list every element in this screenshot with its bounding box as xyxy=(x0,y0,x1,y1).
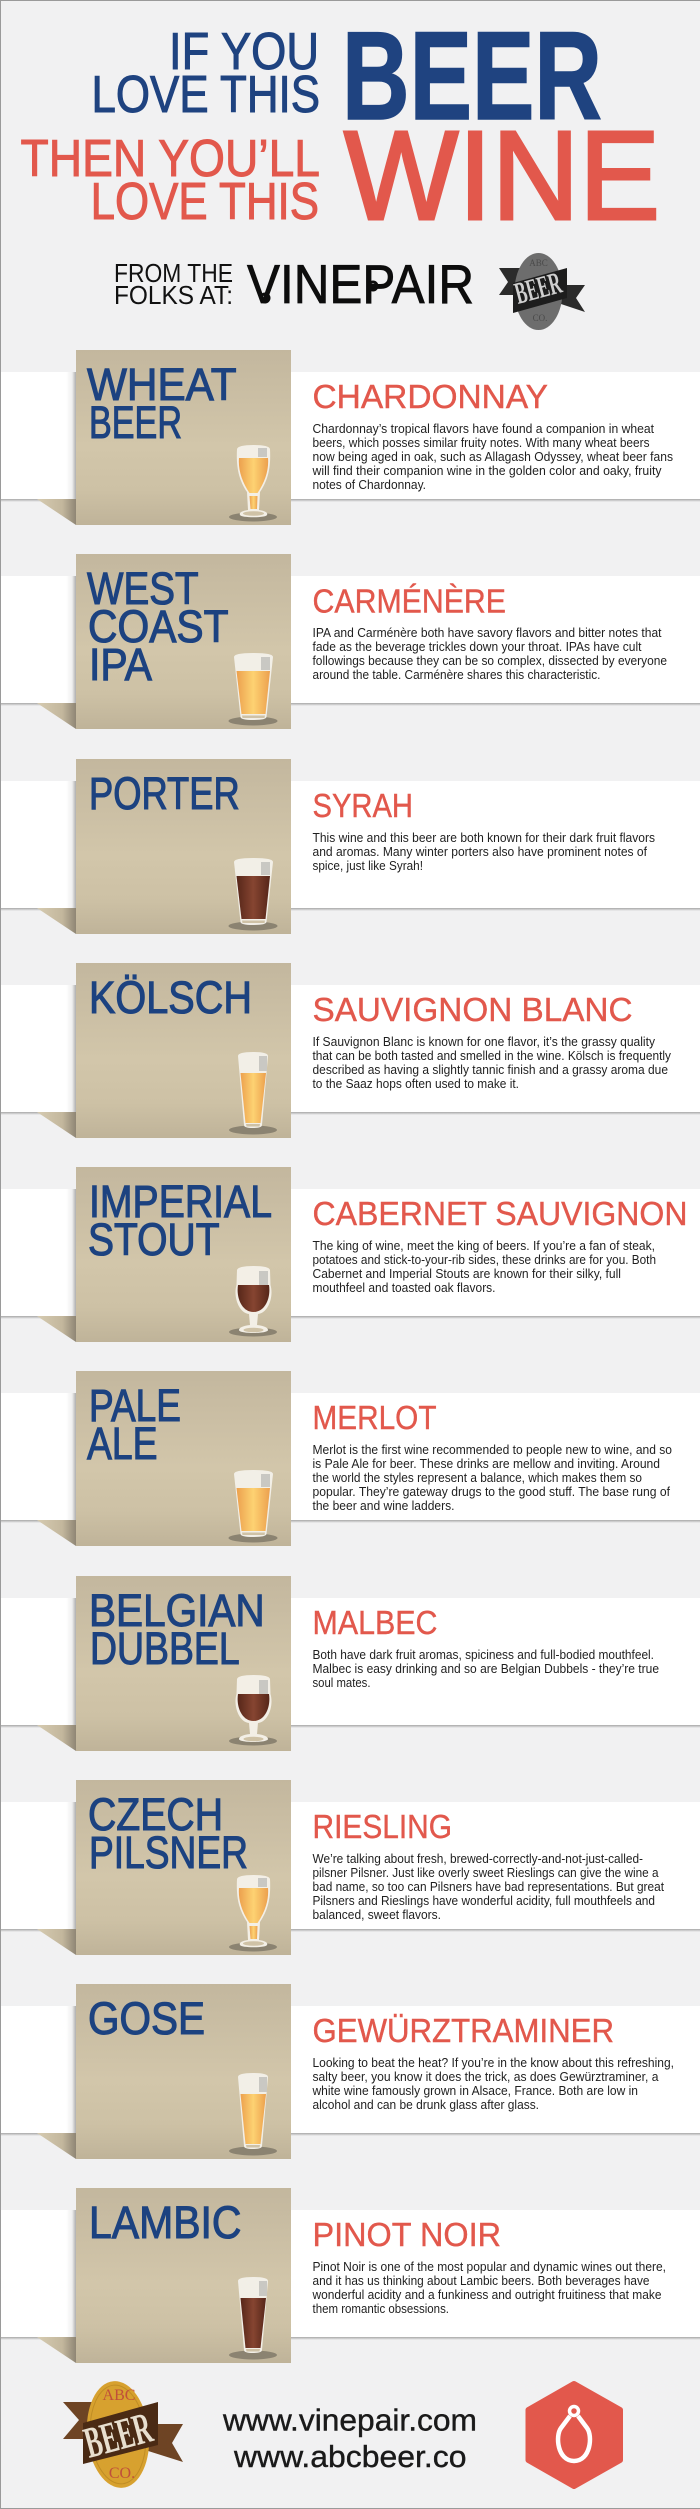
row: belgian dubbel and malbec xyxy=(0,1576,700,1751)
title xyxy=(20,7,660,246)
icon: pint glass amber xyxy=(228,653,278,726)
description: white wine famously grown in Alsace, France. Both are low in xyxy=(312,2084,638,2098)
white band xyxy=(0,1802,700,1932)
tag fold xyxy=(37,1929,76,1955)
description xyxy=(312,831,655,873)
white band xyxy=(0,576,700,706)
beer name xyxy=(88,1789,248,1878)
description: balanced, sweet flavors. xyxy=(312,1908,441,1922)
white band xyxy=(0,985,700,1115)
description: potatoes and stick-to-your-rib sides, these drinks are for you. Both xyxy=(312,1253,656,1267)
tag fold xyxy=(37,2337,76,2363)
tag shadow xyxy=(66,2210,76,2337)
description: alcohol and can be drunk glass after glass. xyxy=(312,2098,539,2112)
beer tag panel xyxy=(76,1167,291,1342)
wine name: MERLOT xyxy=(312,1399,436,1436)
heading: then you'll love this wine: WINE xyxy=(344,105,660,246)
beer name: PALE xyxy=(89,1380,181,1431)
description: bad name, so too can Pilsners have bad representations. But great xyxy=(312,1880,664,1894)
logo: abc beer co grey: BEER xyxy=(511,265,566,311)
wine name: RIESLING xyxy=(312,1808,452,1845)
description: spice, just like Syrah! xyxy=(312,859,423,873)
description: Pilsners and Rieslings have wonderful acidity, full mouthfeels and xyxy=(312,1894,655,1908)
beer name: CZECH xyxy=(88,1789,223,1840)
row: pale ale and merlot xyxy=(0,1371,700,1546)
description xyxy=(312,1239,656,1295)
tag fold xyxy=(37,499,76,525)
wine name: CARMÉNÈRE xyxy=(312,582,506,620)
beer name: WHEAT xyxy=(87,359,237,410)
beer name: BELGIAN xyxy=(89,1585,265,1636)
beer tag panel xyxy=(76,963,291,1138)
description: to the Saaz hops often used to make it. xyxy=(312,1077,519,1091)
website links: www.vinepair.com xyxy=(222,2402,477,2438)
description: wonderful acidity and a funkiness and outright fruitiness that make xyxy=(312,2288,662,2302)
description: The king of wine, meet the king of beers. If you’re a fan of steak, xyxy=(312,1239,655,1253)
description: mouthfeel and toasted oak flavors. xyxy=(312,1281,496,1295)
tag shadow xyxy=(66,1598,76,1725)
white band xyxy=(0,2210,700,2340)
heading: then you'll love this wine: THEN YOU’LL xyxy=(20,130,320,188)
tag fold xyxy=(37,1316,76,1342)
heading: then you'll love this wine xyxy=(20,105,660,246)
description: Merlot is the first wine recommended to people new to wine, and so xyxy=(312,1443,672,1457)
tag fold xyxy=(37,1725,76,1751)
logo: abc beer co colour: ABC xyxy=(103,2387,135,2404)
beer name xyxy=(89,1585,265,1674)
description xyxy=(312,1852,664,1922)
wine name: MALBEC xyxy=(312,1604,438,1641)
white band xyxy=(0,1393,700,1523)
beer name: STOUT xyxy=(88,1214,220,1265)
tag shadow xyxy=(66,985,76,1112)
beer name xyxy=(87,563,229,690)
icon: pint glass dark xyxy=(228,858,278,930)
tag fold xyxy=(37,1112,76,1138)
beer name: PORTER xyxy=(89,768,240,819)
beer name: COAST xyxy=(88,601,229,652)
heading: if you love this beer: IF YOU xyxy=(169,23,319,81)
description xyxy=(312,422,673,492)
description: now being aged in oak, such as Allagash Odyssey, wheat beer fans xyxy=(312,450,673,464)
white band xyxy=(0,1189,700,1319)
row: lambic and pinot noir xyxy=(0,2188,700,2363)
description: the world the styles represent a balance, which makes them so xyxy=(312,1471,642,1485)
description: them romantic obsessions. xyxy=(312,2302,449,2316)
beer tag panel xyxy=(76,1576,291,1751)
tag shadow xyxy=(66,1189,76,1316)
description xyxy=(312,1443,672,1513)
white band xyxy=(0,781,700,911)
icon: tall glass dark xyxy=(229,2277,277,2360)
logo: vinepair hexagon xyxy=(528,2384,620,2486)
logo: abc beer co grey: CO. xyxy=(533,313,547,323)
description xyxy=(312,1035,672,1091)
website links: www.abcbeer.co xyxy=(233,2439,466,2474)
white band xyxy=(0,2006,700,2136)
beer name xyxy=(88,1176,272,1265)
description: will find their companion wine in the golden color and oaky, fruity xyxy=(312,464,662,478)
description: fade as the beverage trickles down your throat. IPAs have cult xyxy=(312,640,642,654)
beer name xyxy=(87,359,237,448)
description xyxy=(312,2056,674,2112)
icon: tall glass amber xyxy=(229,2073,277,2156)
description xyxy=(312,626,667,682)
icon: goblet dark xyxy=(229,1266,277,1336)
wine name: PINOT NOIR xyxy=(312,2216,501,2253)
wine name: CHARDONNAY xyxy=(312,378,548,415)
tag shadow xyxy=(66,576,76,703)
logo: abc beer co grey: ABC xyxy=(529,258,548,268)
tag fold xyxy=(37,2133,76,2159)
row: imperial stout and cabernet sauvignon xyxy=(0,1167,700,1342)
icon: tall glass amber xyxy=(229,1052,277,1134)
tag fold xyxy=(37,1520,76,1546)
description: beers, which posses similar fruity notes. With many wheat beers xyxy=(312,436,650,450)
wine name: SAUVIGNON BLANC xyxy=(312,991,632,1028)
row: porter and syrah xyxy=(0,759,700,934)
tag shadow xyxy=(66,2006,76,2133)
website links xyxy=(222,2402,477,2474)
description: IPA and Carménère both have savory flavors and bitter notes that xyxy=(312,626,662,640)
description: Cabernet and Imperial Stouts are known for their silky, full xyxy=(312,1267,621,1281)
icon: goblet dark xyxy=(229,1675,277,1746)
wine name: GEWÜRZTRAMINER xyxy=(312,2012,614,2049)
icon: pint glass amber xyxy=(228,1470,278,1542)
description: the beer and wine ladders. xyxy=(312,1499,454,1513)
logo: abc beer co colour xyxy=(63,2379,183,2490)
description: salty beer, you know it does the trick, as does Gewürztraminer, a xyxy=(312,2070,659,2084)
white band xyxy=(0,372,700,502)
description: soul mates. xyxy=(312,1676,370,1690)
beer name: DUBBEL xyxy=(90,1623,240,1674)
beer name: WEST xyxy=(87,563,199,614)
beer tag panel xyxy=(76,759,291,934)
description: Looking to beat the heat? If you’re in the know about this refreshing, xyxy=(312,2056,674,2070)
tag shadow xyxy=(66,1802,76,1929)
row: wheat beer and chardonnay xyxy=(0,350,700,525)
logo: vinepair wordmark: VINEPAIR xyxy=(247,253,474,315)
description: This wine and this beer are both known for their dark fruit flavors xyxy=(312,831,655,845)
tag shadow xyxy=(66,781,76,908)
white band xyxy=(0,1598,700,1728)
beer name xyxy=(87,1380,181,1469)
description: pilsner Pilsner. Just like overly sweet Rieslings can give the wine a xyxy=(312,1866,659,1880)
beer name: GOSE xyxy=(88,1993,205,2044)
wine name: CABERNET SAUVIGNON xyxy=(312,1195,688,1232)
tag shadow xyxy=(66,1393,76,1520)
beer tag panel xyxy=(76,1984,291,2159)
description: Pinot Noir is one of the most popular and dynamic wines out there, xyxy=(312,2260,666,2274)
description: is Pale Ale for beer. These drinks are mellow and inviting. Around xyxy=(312,1457,660,1471)
beer name: IPA xyxy=(89,639,152,690)
description: that can be both tasted and smelled in the wine. Kölsch is frequently xyxy=(312,1049,672,1063)
heading: if you love this beer: BEER xyxy=(342,7,602,146)
credit: from the folks at xyxy=(114,258,233,310)
tag fold xyxy=(37,908,76,934)
beer name: PILSNER xyxy=(89,1827,248,1878)
description: around the table. Carménère shares this characteristic. xyxy=(312,668,600,682)
logo: abc beer co colour: CO. xyxy=(109,2465,135,2482)
beer name: LAMBIC xyxy=(89,2197,242,2248)
credit: from the folks at: FROM THE xyxy=(114,258,233,288)
icon: tulip glass amber xyxy=(229,445,277,522)
description: Chardonnay’s tropical flavors have found a companion in wheat xyxy=(312,422,655,436)
description: If Sauvignon Blanc is known for one flavor, it’s the grassy quality xyxy=(312,1035,656,1049)
beer name: BEER xyxy=(89,397,182,448)
row: kolsch and sauvignon blanc xyxy=(0,963,700,1138)
description: popular. They’re gateway drugs to the good stuff. The base rung of xyxy=(312,1485,671,1499)
wine name: SYRAH xyxy=(312,787,413,824)
logo: abc beer co grey xyxy=(499,253,585,330)
description: We’re talking about fresh, brewed-correctly-and-not-just-called- xyxy=(312,1852,643,1866)
description: notes of Chardonnay. xyxy=(312,478,426,492)
beer name: KÖLSCH xyxy=(89,972,252,1023)
row: gose and gewurztraminer xyxy=(0,1984,700,2159)
tag shadow xyxy=(66,372,76,499)
description: Both have dark fruit aromas, spiciness and full-bodied mouthfeel. xyxy=(312,1648,654,1662)
description: and aromas. Many winter porters also have prominent notes of xyxy=(312,845,647,859)
beer tag panel xyxy=(76,554,291,729)
row: west coast ipa and carmenere xyxy=(0,554,700,729)
logo: abc beer co colour: BEER xyxy=(79,2403,158,2468)
heading: then you'll love this wine: LOVE THIS xyxy=(91,173,319,231)
beer name: IMPERIAL xyxy=(89,1176,272,1227)
description: Malbec is easy drinking and so are Belgian Dubbels - they’re true xyxy=(312,1662,659,1676)
credit: from the folks at: FOLKS AT: xyxy=(114,280,233,310)
beer tag panel xyxy=(76,1371,291,1546)
beer tag panel xyxy=(76,2188,291,2363)
description xyxy=(312,1648,659,1690)
icon: tulip glass amber xyxy=(229,1875,277,1952)
beer tag panel xyxy=(76,1780,291,1955)
description: described as having a slightly tannic finish and a grassy aroma due xyxy=(312,1063,668,1077)
description: followings because they can be so complex, dissected by everyone xyxy=(312,654,667,668)
row: czech pilsner and riesling xyxy=(0,1780,700,1955)
beer name: ALE xyxy=(87,1418,158,1469)
tag fold xyxy=(37,703,76,729)
beer tag panel xyxy=(76,350,291,525)
heading: if you love this beer: LOVE THIS xyxy=(92,66,320,124)
description xyxy=(312,2260,666,2316)
description: and it has us thinking about Lambic beers. Both beverages have xyxy=(312,2274,650,2288)
heading: if you love this beer xyxy=(92,7,602,146)
